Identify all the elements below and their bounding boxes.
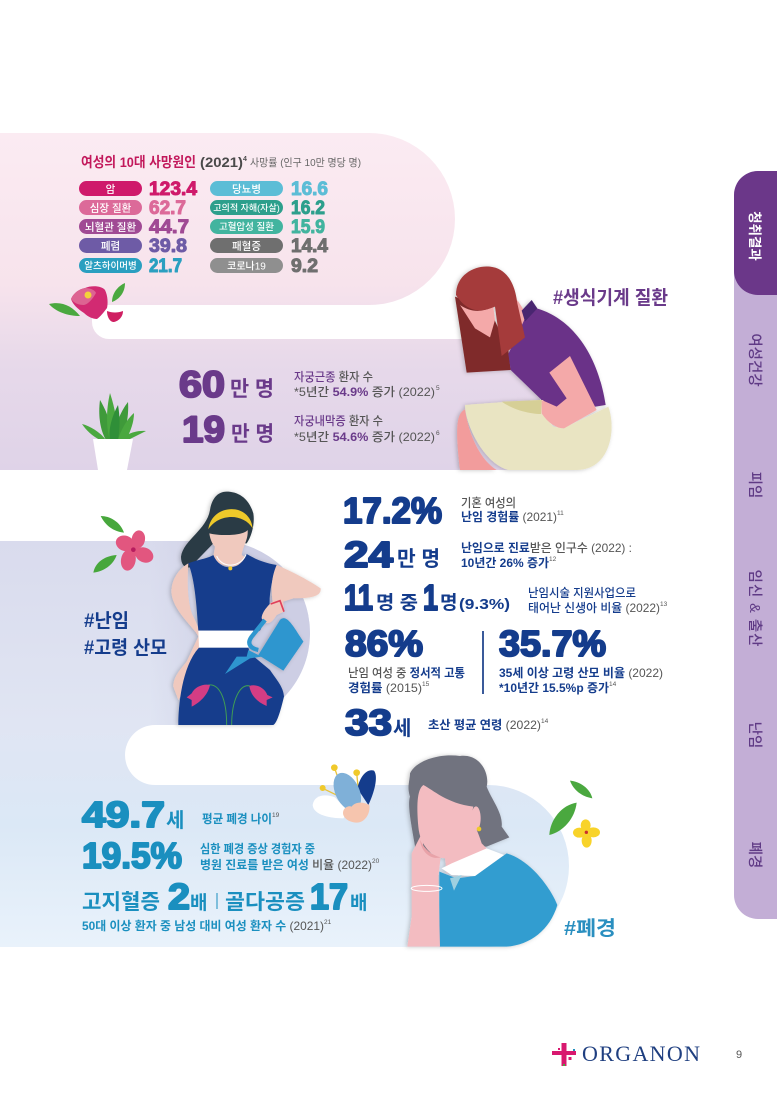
stat: 17.2%: 11: [557, 510, 564, 517]
stat: hyperlipidemia and osteoporosis: 배: [190, 892, 207, 914]
stat: first birth age 33: 세: [393, 717, 411, 740]
heading: top 10 causes of death: (2021): [200, 154, 243, 170]
hashtag: infertility, advanced maternal age: #고령 산모: [84, 637, 167, 659]
icon: blue flower bud: [313, 764, 376, 823]
heading: top 10 causes of death: [81, 154, 361, 170]
chart: right death causes: 패혈증: [232, 240, 261, 252]
stat: menopause age: 세: [166, 809, 184, 832]
chart: right death causes: 16.6: [291, 179, 328, 200]
stat: 1 in 11: 13: [660, 601, 668, 608]
chart: right death causes: 14.4: [291, 236, 328, 257]
stat: menopause age: 49.7: [82, 794, 165, 835]
hashtag: infertility, advanced maternal age: [84, 610, 167, 659]
chart: right death causes: 15.9: [291, 217, 325, 238]
tab label: 여성건강: 여성건강: [746, 333, 763, 387]
stat: 1 in 11: 태어난 신생아 비율 (2022): [528, 600, 660, 615]
stat: fibroids 600k: 자궁근종 환자 수: [294, 370, 373, 384]
stat: endometriosis 190k: 만 명: [231, 423, 274, 446]
chart: left death causes: 39.8: [149, 236, 187, 257]
stat: 35.7%: *10년간 15.5%p 증가: [499, 680, 609, 695]
stat: hyperlipidemia and osteoporosis: 17: [310, 876, 348, 917]
stat: fibroids 600k: 5: [436, 385, 440, 392]
stat: endometriosis 190k: 자궁내막증 환자 수: [294, 414, 383, 428]
chart: right death causes: 16.2: [291, 198, 325, 219]
stat: 1 in 11: (9.3%): [459, 596, 510, 613]
stat: 1 in 11: 명 중: [376, 592, 418, 614]
hashtag: menopause: #폐경: [564, 917, 616, 940]
stat: fibroids 600k: *5년간 54.9% 증가 (2022): [294, 385, 435, 399]
stat: hyperlipidemia and osteoporosis: 골다공증: [225, 891, 305, 914]
stat: first birth age 33: [345, 702, 549, 743]
stat: fibroids 600k: [179, 364, 440, 405]
chart: left death causes: 뇌혈관 질환: [85, 220, 136, 234]
stat: menopause age: [82, 794, 280, 835]
stat: fibroids 600k: 60: [179, 364, 225, 405]
stat: 19.5%: [82, 835, 380, 876]
stat: 19.5%: 20: [372, 858, 380, 865]
chart: left death causes: 44.7: [149, 217, 189, 238]
stat: 19.5%: 병원 진료를 받은 여성 비율 (2022): [200, 858, 372, 872]
stat: 17.2%: 17.2%: [343, 490, 442, 531]
tab: active section: [734, 171, 777, 295]
chart: left death causes: 폐렴: [101, 240, 120, 252]
heading: top 10 causes of death: 4: [243, 156, 247, 163]
stat: endometriosis 190k: *5년간 54.6% 증가 (2022): [294, 430, 435, 444]
panel: reproductive disease background: [0, 133, 540, 470]
icon: camellia flower: [49, 283, 125, 322]
stat: 1 in 11: 11: [344, 577, 373, 618]
chart: right death causes: 당뇨병: [232, 184, 261, 196]
chart: left death causes: 62.7: [149, 198, 186, 219]
stat: 17.2%: [343, 490, 564, 531]
stat: 86%: [345, 623, 465, 695]
stat: 19.5%: 19.5%: [82, 835, 182, 876]
tab label: 임신 & 출산: 임신 & 출산: [746, 570, 763, 646]
stat: menopause age: 평균 폐경 나이: [202, 812, 272, 826]
stat: 35.7%: 14: [609, 681, 617, 688]
stat: 17.2%: 난임 경험률 (2021): [461, 509, 557, 524]
chart: right death causes: 고의적 자해(자살): [213, 202, 280, 213]
icon: yellow flower with leaves: [549, 781, 600, 848]
stat: 17.2%: 기혼 여성의: [461, 496, 516, 510]
stat: endometriosis 190k: 19: [182, 409, 225, 450]
circle behind watering woman: [150, 541, 310, 725]
logo: Organon: ORGANON: [582, 1041, 700, 1066]
illustration: woman with watering can: [171, 492, 321, 725]
page number: 9: [736, 1049, 742, 1061]
stat: hyperlipidemia and osteoporosis: 배: [350, 892, 367, 914]
chart: left death causes: 21.7: [149, 256, 182, 277]
stat: 240k: 12: [549, 556, 557, 563]
sidebar: section tabs: [734, 171, 777, 919]
tab label: 청취결과: 청취결과: [747, 211, 762, 261]
chart: left death causes: 123.4: [149, 179, 197, 200]
stat: first birth age 33: 33: [345, 702, 392, 743]
chart: left death causes: 알츠하이머병: [84, 260, 137, 272]
tab label: 폐경: 폐경: [746, 842, 763, 868]
stat: 86%: 15: [422, 681, 430, 688]
stat: endometriosis 190k: 6: [436, 430, 440, 437]
tab label: 난임: 난임: [746, 722, 763, 748]
chart: right death causes: [210, 179, 328, 277]
stat: 1 in 11: 난임시술 지원사업으로: [528, 586, 636, 600]
stat: hyperlipidemia and osteoporosis: 21: [324, 919, 332, 926]
hashtag: infertility, advanced maternal age: #난임: [84, 610, 129, 632]
stat: hyperlipidemia and osteoporosis: [82, 876, 367, 933]
stat: 240k: 만 명: [397, 548, 440, 571]
stat: 1 in 11: 1: [423, 577, 438, 618]
icon: potted plant: [82, 393, 146, 470]
stat: 86%: 경험률 (2015): [348, 680, 422, 695]
tab label: 피임: 피임: [746, 472, 763, 498]
chart: left death causes: 암: [106, 182, 116, 196]
stat: 35.7%: 35세 이상 고령 산모 비율 (2022): [499, 666, 663, 680]
stat: hyperlipidemia and osteoporosis: 2: [168, 876, 190, 917]
stat: 240k: 난임으로 진료받은 인구수 (2022) :: [461, 541, 632, 555]
chart: right death causes: 고혈압성 질환: [219, 221, 274, 233]
chart: right death causes: 9.2: [291, 256, 318, 277]
stat: 240k: 10년간 26% 증가: [461, 555, 549, 570]
stat: endometriosis 190k: [182, 409, 440, 450]
stat: menopause age: 19: [272, 812, 280, 819]
stat: 35.7%: 35.7%: [499, 623, 606, 664]
illustration: woman holding abdomen: [455, 266, 612, 470]
chart: right death causes: 코로나19: [227, 260, 266, 272]
icon: pink hibiscus flower: [93, 516, 156, 573]
heading: top 10 causes of death: 여성의 10대 사망원인: [81, 154, 196, 170]
hashtag: reproductive disease: #생식기계 질환: [553, 287, 668, 309]
stat: hyperlipidemia and osteoporosis: 고지혈증: [82, 891, 160, 914]
stat: hyperlipidemia and osteoporosis: 50대 이상 환자 중 남성 대비 여성 환자 수 (2021): [82, 919, 324, 933]
panel: infertility background: [0, 541, 569, 947]
stat: first birth age 33: 초산 평균 연령 (2022): [428, 718, 541, 732]
stat: fibroids 600k: 만 명: [230, 378, 274, 401]
stat: 35.7%: [499, 623, 663, 695]
stat: 19.5%: 심한 폐경 증상 경험자 중: [200, 841, 315, 856]
stat: first birth age 33: 14: [541, 718, 549, 725]
heading: top 10 causes of death: 사망률 (인구 10만 명당 명): [250, 157, 361, 169]
stat: 1 in 11: 명: [440, 592, 457, 614]
stat: 1 in 11: [344, 577, 668, 618]
stat: 240k: 24: [344, 534, 393, 575]
stat: 86%: 86%: [345, 623, 423, 664]
stat: 86%: 난임 여성 중 정서적 고통: [348, 666, 465, 680]
stat: 240k: [344, 534, 632, 575]
chart: left death causes: 심장 질환: [90, 202, 132, 214]
illustration: woman with hand on face: [407, 755, 557, 947]
chart: left death causes: [79, 179, 197, 277]
